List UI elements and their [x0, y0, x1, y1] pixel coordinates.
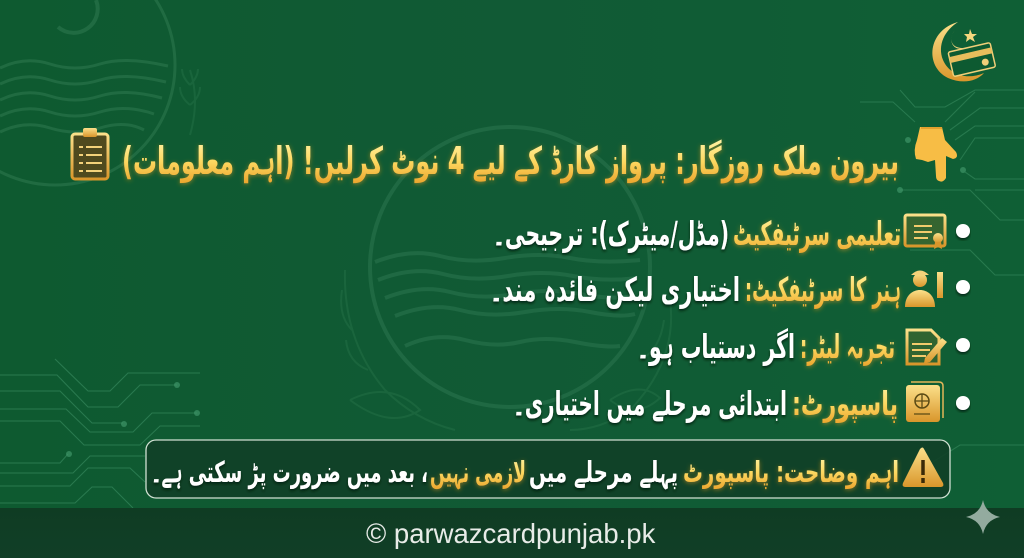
icon: skilled worker	[905, 270, 943, 307]
label: تعلیمی سرٹیفکیٹ	[733, 214, 901, 254]
icon: document and pen	[907, 330, 947, 364]
text: اختیاری لیکن فائدہ مند۔	[490, 270, 740, 310]
icon: certificate	[905, 215, 945, 249]
logo: crescent and card	[932, 22, 996, 81]
bullet	[956, 224, 970, 238]
text: ابتدائی مرحلے میں اختیاری۔	[513, 384, 787, 424]
item 3	[637, 327, 970, 367]
note text: پہلے مرحلے میں	[529, 455, 678, 490]
footer bar	[0, 508, 1024, 558]
bullet	[956, 280, 970, 294]
note text: اہم وضاحت: پاسپورٹ	[683, 455, 899, 490]
icon: pointing hand	[915, 127, 957, 182]
item 4	[513, 382, 970, 424]
callout: note box	[146, 440, 950, 498]
bullet	[956, 396, 970, 410]
label: پاسپورٹ:	[792, 384, 898, 424]
item 1	[493, 214, 970, 254]
watermark: top-left emblem	[0, 0, 175, 185]
sparkle star	[966, 500, 1000, 534]
icon: passport	[906, 382, 943, 422]
label: تجربہ لیٹر:	[800, 327, 895, 367]
note text: لازمی نہیں	[430, 455, 526, 490]
bullet	[956, 338, 970, 352]
watermark: center emblem	[370, 127, 650, 407]
note text: ، بعد میں ضرورت پڑ سکتی ہے۔	[151, 455, 428, 490]
icon: clipboard	[72, 128, 108, 179]
watermark: wreath leaves	[180, 69, 671, 430]
icon: warning triangle	[903, 448, 943, 487]
footer url: © parwazcardpunjab.pk	[366, 518, 656, 549]
note text	[151, 455, 899, 490]
watermark: circuit lines left	[0, 359, 200, 508]
text: اگر دستیاب ہو۔	[637, 327, 795, 367]
item 2	[490, 270, 970, 310]
watermark: circuit lines right	[860, 90, 1024, 470]
text: (مڈل/میٹرک): ترجیحی۔	[493, 214, 729, 254]
